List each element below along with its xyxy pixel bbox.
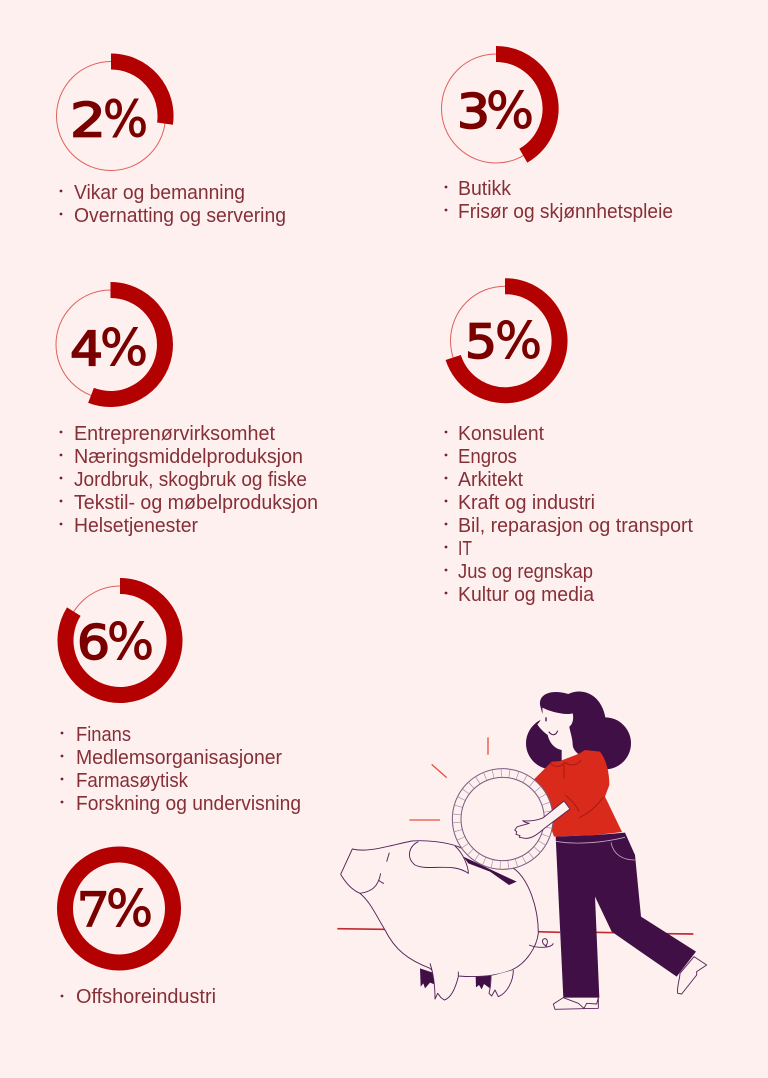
list: 4% industries: Tekstil- og møbelproduksjon [74,492,318,514]
piggy bank [341,841,538,1000]
list: 4% industries [60,423,318,537]
list: 5% industries: Bil, reparasjon og transport [458,515,693,537]
coin [452,769,553,869]
panel: 5% [445,286,693,606]
number: 5%: % [495,312,542,370]
list: 4% industries: Entreprenørvirksomhet [74,423,275,445]
list: 5% industries: Arkitekt [458,469,523,491]
list: 5% industries: Kultur og media [458,584,595,606]
ring chart: 7% [65,854,173,962]
number: 7%: % [106,880,153,938]
number: 5% [465,312,542,370]
piggy bank: coin slot [463,857,517,885]
panel: 2% [56,61,286,227]
piggy bank: ear [409,842,468,873]
list: 6% industries [61,724,301,815]
woman: shirt details [551,760,603,818]
woman: waistband and pocket [556,837,635,860]
woman: shirt [534,750,622,837]
list: 6% industries: Forskning og undervisning [76,793,301,815]
number: 2%: 2 [70,94,106,148]
illustration: woman putting coin in piggy bank [337,691,707,1009]
woman: facial features [546,717,558,735]
number: 3%: % [486,82,534,140]
list: 3% industries: Frisør og skjønnhetspleie [458,201,673,223]
panel: 7% [61,854,216,1008]
piggy bank: face and tail [360,853,553,947]
list: 2% industries [60,182,286,227]
list: 5% industries: Jus og regnskap [458,561,593,583]
number: 5%: 5 [465,315,497,370]
ring chart: 6% [66,586,175,695]
list: 2% industries: Vikar og bemanning [74,182,245,204]
list: 6% industries: Finans [76,724,131,746]
list: 3% industries: Butikk [458,178,512,200]
list: 5% industries [445,423,693,606]
woman: hair [526,691,631,769]
number: 2%: % [103,90,148,148]
piggy bank: dark far legs [420,968,491,989]
panel: 4% [56,290,318,537]
list: 6% industries: Farmasøytisk [76,770,189,792]
piggy bank: ear and face [360,842,553,947]
piggy bank: near legs [430,963,513,1000]
list: 4% industries: Næringsmiddelproduksjon [74,446,303,468]
list: 7% industries: Offshoreindustri [76,986,216,1008]
number: 7% [77,880,153,938]
number: 4% [70,319,148,377]
list: 4% industries: Jordbruk, skogbruk og fiske [74,469,307,491]
ring chart: 4% [56,290,165,399]
ring chart: 2% [56,61,166,170]
number: 6%: % [107,613,154,671]
list: 5% industries: Kraft og industri [458,492,595,514]
number: 2% [70,90,148,148]
list: 5% industries: IT [458,538,472,560]
woman: face and neck [537,708,578,762]
number: 6%: 6 [77,616,110,671]
number: 4%: 4 [70,322,103,377]
list: 5% industries: Engros [458,446,517,468]
list: 4% industries: Helsetjenester [74,515,198,537]
list: 6% industries: Medlemsorganisasjoner [76,747,282,769]
number: 6% [77,613,154,671]
list: 2% industries: Overnatting og servering [74,205,286,227]
floor line [337,929,693,934]
number: 3% [457,82,534,140]
woman: trousers [556,833,696,998]
panel: 6% [61,586,301,815]
piggy bank: body [341,841,538,977]
number: 4%: % [100,319,148,377]
ring chart: 3% [442,54,551,163]
list: 5% industries: Konsulent [458,423,544,445]
woman: arm and hand [515,801,570,838]
list: 3% industries [445,178,673,223]
ring chart: 5% [450,286,560,395]
sparkle lines [409,737,488,820]
number: 7%: 7 [77,883,109,938]
woman: shoes [553,957,707,1009]
number: 3%: 3 [457,85,490,140]
panel: 3% [442,54,673,223]
